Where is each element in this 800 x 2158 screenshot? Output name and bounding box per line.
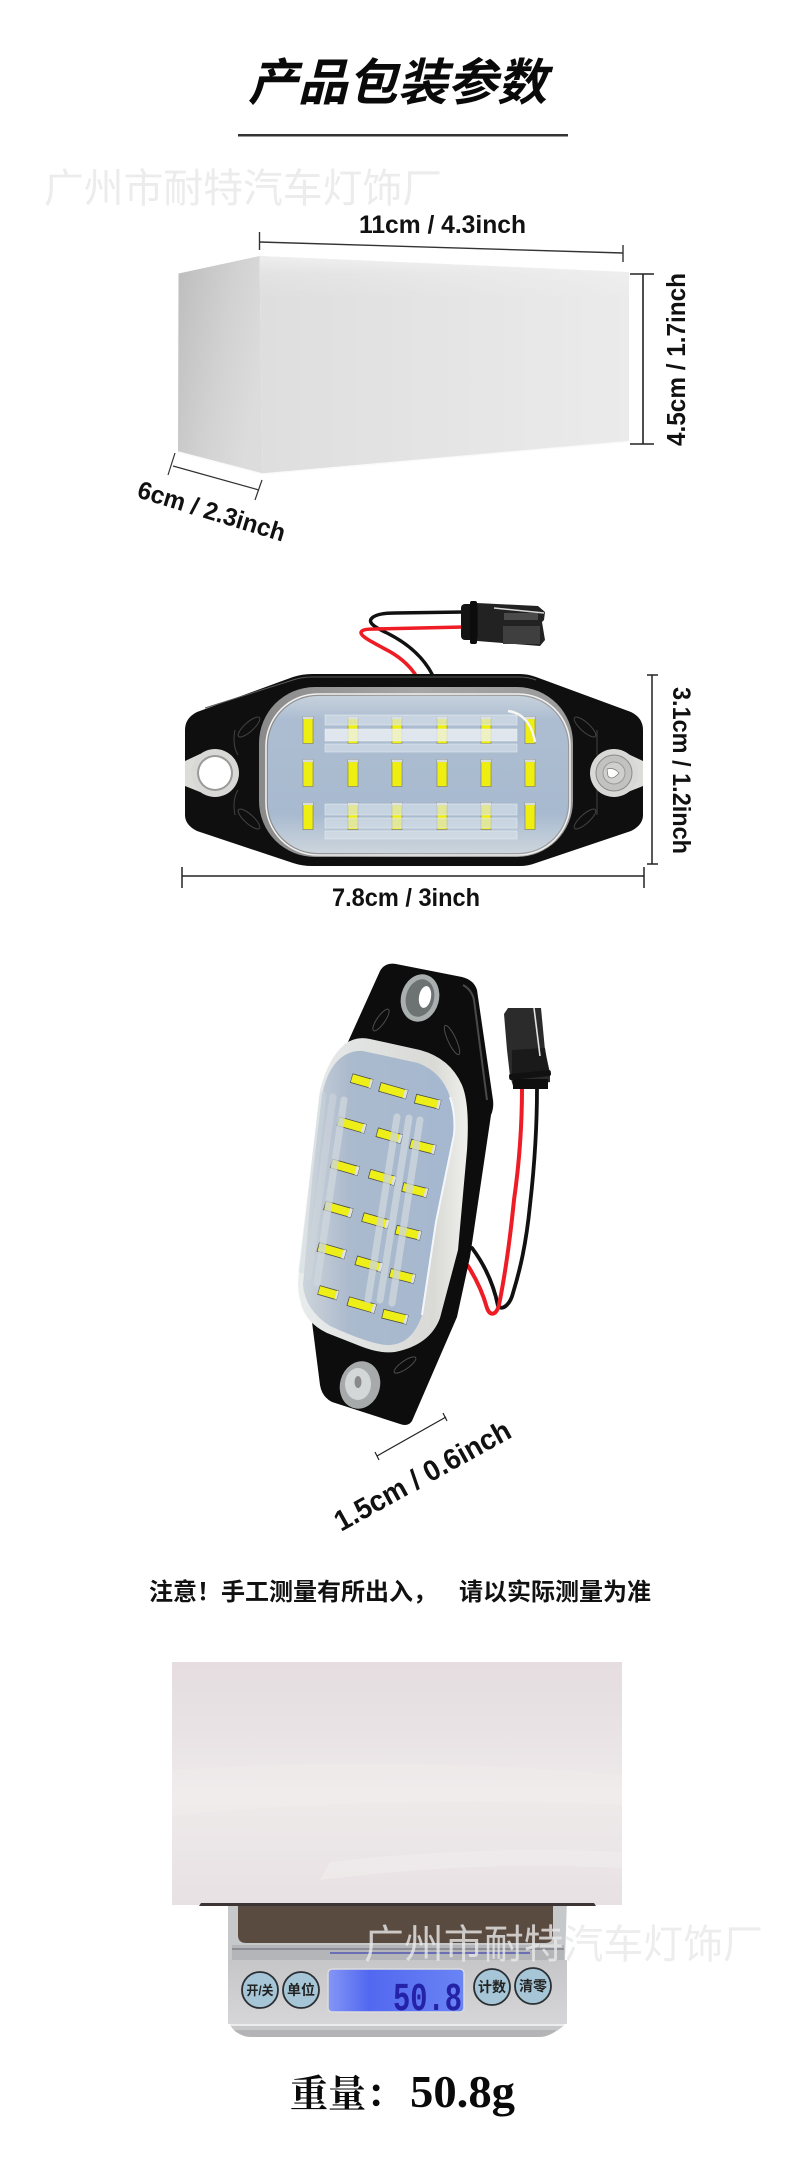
panel: package box [178, 256, 629, 474]
light guide bars [325, 715, 517, 839]
lens blue [268, 696, 568, 853]
dimension: lamp depth: 1.5cm / 0.6inch [329, 1415, 517, 1538]
button unit [283, 1972, 319, 2008]
scale body [228, 1900, 568, 2040]
button on/off: 开/关 [246, 1983, 274, 1998]
wires [361, 612, 464, 674]
button count: 计数 [478, 1979, 506, 1995]
panel: white carton on scale [172, 1662, 622, 1906]
lamp housing [185, 674, 643, 866]
note text: 请以实际测量为准 [459, 1579, 651, 1606]
box front face [260, 256, 629, 474]
wires [468, 1088, 537, 1314]
dimension: lamp width: 7.8cm / 3inch [332, 884, 480, 912]
LEDs [317, 1074, 441, 1324]
housing engraving [370, 1007, 462, 1376]
watermark bottom: 广州市耐特汽车灯饰厂 [364, 1923, 763, 1967]
dimension: box length [260, 211, 623, 262]
dimension: lamp height: 3.1cm / 1.2inch [667, 687, 695, 854]
scale plate [238, 1905, 553, 1943]
note text: 注意！手工测量有所出入， [149, 1578, 437, 1606]
button unit: 单位 [287, 1982, 315, 1998]
scale face [228, 1960, 567, 2024]
light guide bars [302, 1095, 420, 1303]
lcd display: 50.8 [393, 1978, 462, 2023]
left mounting hole [185, 749, 239, 797]
lower mounting hole [334, 1357, 386, 1413]
watermark top: 广州市耐特汽车灯饰厂 [44, 167, 442, 211]
lcd display [328, 1969, 464, 2023]
lens rim [298, 1038, 468, 1352]
lens reflection [508, 711, 535, 742]
panel: weighing scale [228, 1900, 568, 2040]
right mounting hole [590, 749, 643, 797]
lamp housing [312, 964, 493, 1425]
button count [474, 1969, 510, 2005]
weight caption [290, 2066, 515, 2117]
title: 产品包装参数 [248, 55, 554, 111]
lens rim [259, 687, 573, 857]
upper mounting hole [395, 970, 445, 1026]
panel: lamp angled view [298, 964, 551, 1425]
scale tray band [232, 1945, 564, 1960]
housing engraving [234, 714, 598, 832]
dimension: box width: 6cm / 2.3inch [134, 476, 289, 547]
dimension: box height: 4.5cm / 1.7inch [661, 273, 691, 446]
lens blue [303, 1051, 454, 1345]
button on/off [242, 1972, 278, 2008]
weight caption: 重量： [290, 2074, 404, 2116]
box left face [178, 256, 262, 474]
LEDs [303, 716, 535, 830]
button zero [515, 1968, 551, 2004]
button zero: 清零 [519, 1978, 547, 1994]
title underline [238, 134, 568, 136]
weight caption: 50.8g [410, 2066, 515, 2117]
connector [504, 1008, 551, 1089]
panel: lamp front view [185, 601, 643, 866]
connector [461, 601, 545, 646]
dimension: box length: 11cm / 4.3inch [359, 211, 526, 239]
